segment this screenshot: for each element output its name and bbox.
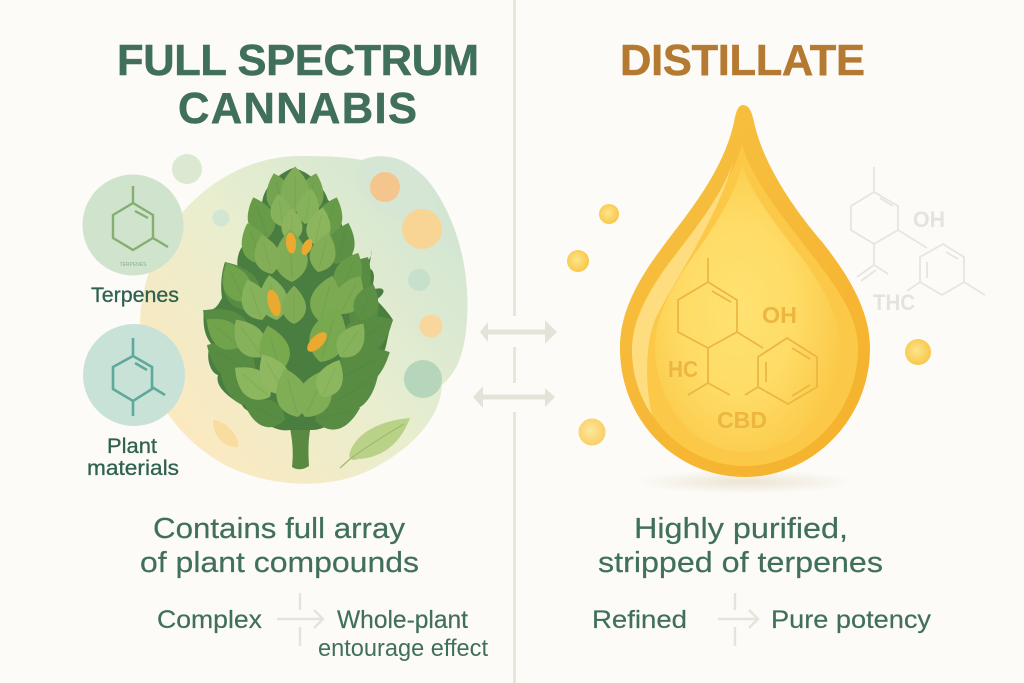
title: full spectrum cannabis: FULL SPECTRUM xyxy=(117,37,479,85)
centre divider xyxy=(513,0,516,683)
molecule labels xyxy=(668,302,797,433)
decorative bubbles xyxy=(172,154,442,398)
right description: Highly purified, xyxy=(634,513,848,545)
pale petal xyxy=(213,420,238,447)
left description: of plant compounds xyxy=(140,547,419,579)
right description: stripped of terpenes xyxy=(598,547,883,579)
small fallen leaf xyxy=(340,418,410,468)
left comparison: Complex xyxy=(157,606,263,634)
molecule labels: HC xyxy=(668,356,698,382)
title: distillate: DISTILLATE xyxy=(620,37,865,85)
faint THC molecule: THC xyxy=(873,290,915,315)
icon: terpenes molecule: TERPENES xyxy=(120,262,147,268)
right comparison: Pure potency xyxy=(771,606,932,634)
top right soft patch xyxy=(355,157,436,221)
label: terpenes: Terpenes xyxy=(91,284,179,307)
bud leaves, front xyxy=(226,347,351,424)
icon: plant materials molecule xyxy=(83,324,185,426)
right comparison: Refined xyxy=(592,606,687,634)
label: plant materials: Plant xyxy=(107,435,157,458)
right comparison xyxy=(592,593,932,646)
resin spots xyxy=(265,232,330,355)
oil drop xyxy=(620,105,870,477)
molecule labels: OH xyxy=(762,302,797,328)
oil drop shadow xyxy=(635,470,855,494)
label: plant materials xyxy=(87,435,179,480)
bud leaves, outer dark layer xyxy=(193,247,402,434)
title: full spectrum cannabis: CANNABIS xyxy=(178,85,417,133)
left comparison: entourage effect xyxy=(318,635,488,662)
oil bubbles xyxy=(567,204,931,446)
label: plant materials: materials xyxy=(87,457,179,480)
left comparison xyxy=(157,593,488,662)
left comparison: Whole-plant xyxy=(337,606,468,634)
right description xyxy=(598,513,883,579)
faint THC molecule xyxy=(851,167,985,315)
bud stem xyxy=(287,415,314,469)
left description: Contains full array xyxy=(153,513,406,545)
left description xyxy=(140,513,419,579)
bud leaves, crown xyxy=(235,166,361,283)
faint THC molecule: OH xyxy=(913,207,945,232)
illustration: cannabis bud xyxy=(193,166,402,469)
CBD molecule xyxy=(678,258,817,404)
double arrows xyxy=(473,320,557,408)
title: full spectrum cannabis xyxy=(117,37,479,133)
bud silhouette xyxy=(203,168,393,430)
icon: terpenes molecule xyxy=(82,174,184,276)
molecule labels: CBD xyxy=(717,407,767,433)
background blob xyxy=(140,156,467,484)
bud leaves, middle xyxy=(198,247,384,376)
